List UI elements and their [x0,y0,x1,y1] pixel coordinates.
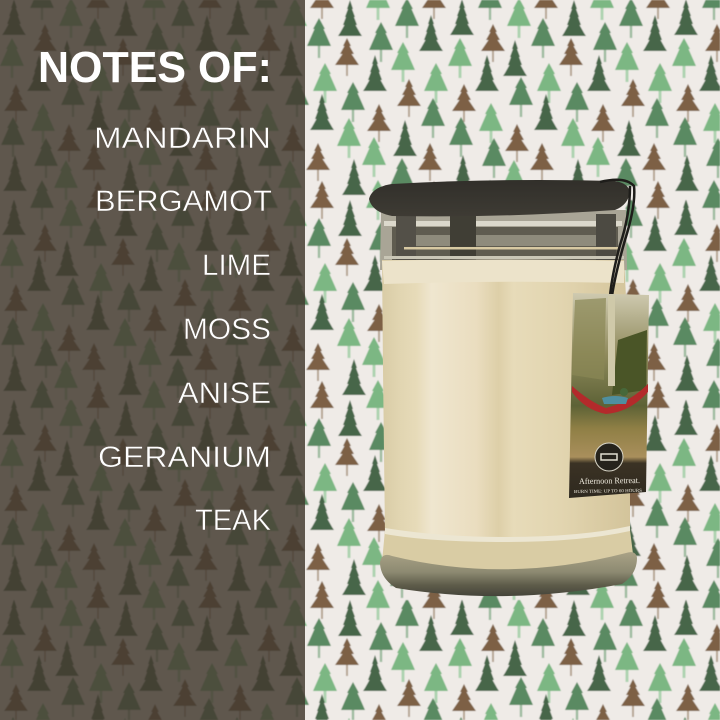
tree trunk [608,296,615,386]
candle jar [369,180,649,596]
jar lid [369,180,630,216]
glass neck highlight [385,526,630,542]
glass neck [382,530,634,571]
jar glass upper section [380,210,627,270]
note: anise: ANISE [178,377,271,410]
note: lime: LIME [202,249,271,282]
note: moss: MOSS [183,313,271,346]
heading and notes list [38,43,272,537]
note: geranium: GERANIUM [98,441,271,474]
panel: dark translucent notes column [0,0,305,720]
hang tag [569,293,649,498]
red hammock [572,384,648,414]
hanging string [600,180,634,296]
note: teak: TEAK [195,504,271,537]
tag logo badge [595,443,623,471]
wax top band [382,260,624,284]
tag photo and card [569,293,649,498]
note: bergamot: BERGAMOT [95,185,272,218]
foliage [572,298,606,380]
tag burn time: BURN TIME: UP TO 60 HOURS [574,488,642,494]
person in hammock [602,396,628,404]
note: mandarin: MANDARIN [94,122,271,155]
jar base [380,552,637,596]
wax body [382,260,630,542]
logo mark [601,454,617,460]
heading: notes of: NOTES OF: [38,43,272,92]
tag name: Afternoon Retreat. [579,475,640,486]
